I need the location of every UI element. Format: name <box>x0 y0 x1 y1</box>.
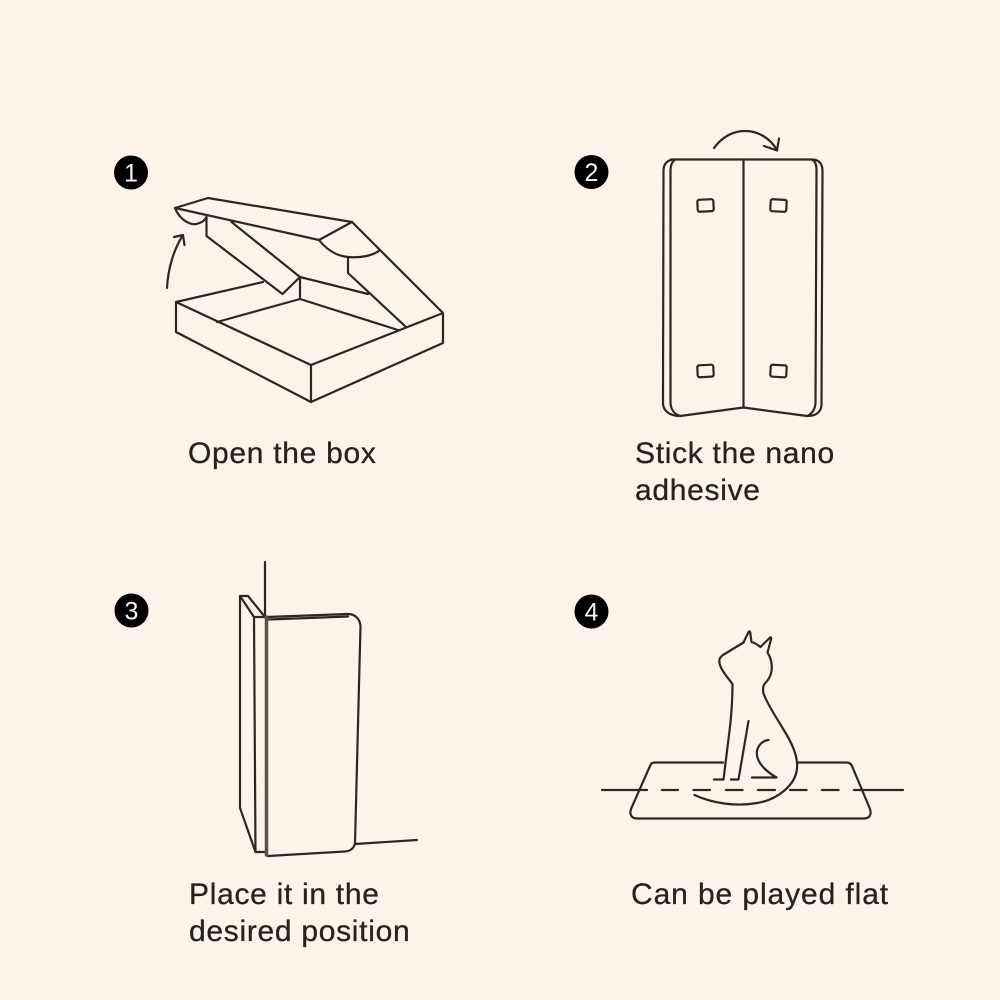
step 3 number badge <box>114 594 148 628</box>
caption: step 1: Open the box <box>188 437 377 470</box>
step 1 number badge <box>114 156 148 190</box>
board <box>630 762 871 818</box>
icon: fold arrow <box>714 131 779 150</box>
icon: lift arrow <box>167 235 184 288</box>
step 4 number badge <box>574 594 608 628</box>
step 1 number badge: 1 <box>124 160 138 188</box>
caption: step 4: Can be played flat <box>631 878 889 911</box>
floor line with dashes <box>602 789 903 791</box>
caption: step 2: adhesive <box>635 474 761 507</box>
caption: step 2 <box>635 437 835 507</box>
cat <box>694 631 797 805</box>
caption: step 3 <box>189 878 410 948</box>
caption: step 2: Stick the nano <box>635 437 835 470</box>
step 4 number badge: 4 <box>585 598 599 626</box>
illustration: opening box <box>167 198 443 402</box>
step 2 number badge: 2 <box>585 159 598 187</box>
step 2 number badge <box>574 155 608 189</box>
illustration: folded board with adhesive pads <box>663 131 822 416</box>
step 3 number badge: 3 <box>125 598 138 626</box>
icon: adhesive pads <box>697 199 787 377</box>
illustration: cat sitting on flat board <box>602 631 903 818</box>
caption: step 3: Place it in the <box>189 878 380 911</box>
caption: step 3: desired position <box>189 915 410 948</box>
illustration: board placed in wall corner <box>240 562 417 856</box>
